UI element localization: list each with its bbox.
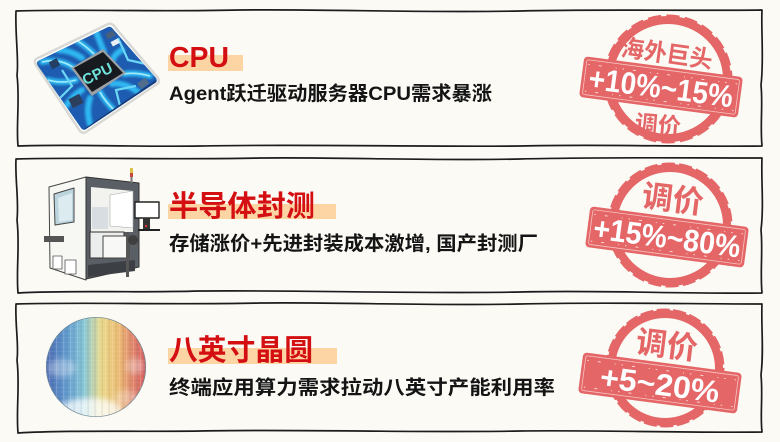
heading: semiconductor packaging: 半导体封测 — [169, 190, 315, 223]
text: packaging description: 存储涨价+先进封装成本激增, 国产封测厂 — [169, 232, 538, 255]
text: CPU description: Agent跃迁驱动服务器CPU需求暴涨 — [169, 83, 493, 105]
stamp: packaging price rise: 调价 — [640, 178, 706, 221]
panel: 8-inch wafer — [16, 303, 762, 433]
panel frame: packaging — [16, 158, 762, 293]
stamp: wafer price rise: 调价 — [634, 324, 700, 367]
icon: silicon wafer — [46, 317, 146, 422]
text: wafer description: 终端应用算力需求拉动八英寸产能利用率 — [169, 376, 555, 399]
stamp: wafer price rise: +5~20% — [598, 359, 722, 410]
stamp: overseas price rise: 调价 — [634, 110, 682, 140]
panel frame: wafer — [16, 303, 762, 433]
panel: semiconductor packaging — [16, 158, 762, 293]
icon: CPU chip — [30, 20, 165, 136]
icon: test machine — [44, 168, 160, 280]
chip label: CPU — [80, 60, 116, 89]
stamp: packaging price rise — [585, 164, 749, 286]
stamp: wafer price rise — [578, 310, 742, 426]
heading: CPU: CPU — [169, 42, 229, 74]
heading: 8-inch wafer: 八英寸晶圆 — [169, 334, 313, 367]
stamp: overseas price rise: +10%~15% — [587, 61, 735, 114]
panel: CPU — [16, 10, 762, 146]
panel frame: CPU — [16, 10, 762, 146]
stamp: overseas price rise — [579, 16, 743, 142]
chip body — [71, 49, 126, 96]
stamp: packaging price rise: +15%~80% — [591, 210, 743, 265]
stamp: overseas price rise: 海外巨头 — [619, 35, 714, 74]
